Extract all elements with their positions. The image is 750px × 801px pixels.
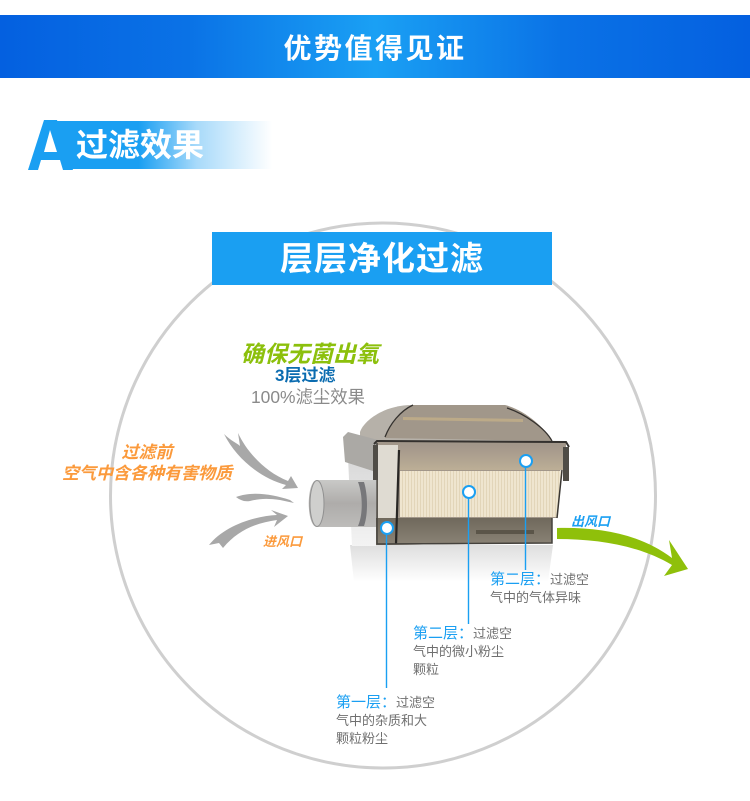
callout: layer 2 dust: 颗粒 bbox=[413, 662, 439, 677]
lower tray bbox=[376, 518, 552, 545]
headline group bbox=[241, 341, 382, 407]
callout: layer 1: 颗粒粉尘 bbox=[336, 731, 388, 746]
callout: layer 2 dust: 气中的微小粉尘 bbox=[413, 644, 504, 659]
intake label: 进风口 bbox=[263, 534, 302, 549]
left flange bbox=[343, 432, 378, 472]
heading band bbox=[57, 121, 272, 169]
blue subtitle: 3层过滤 bbox=[275, 366, 335, 385]
callout: layer 2 gas: 气中的气体异味 bbox=[490, 590, 581, 605]
orange intake text bbox=[62, 443, 234, 483]
inlet pipe bbox=[309, 480, 376, 527]
dark frame lines bbox=[374, 441, 569, 447]
body bbox=[376, 441, 566, 545]
callout: layer 1 bbox=[336, 694, 435, 746]
callout: layer 1: 第一层：过滤空 bbox=[336, 694, 435, 711]
title box: 层层净化过滤 bbox=[280, 240, 484, 277]
top banner: 优势值得见证 bbox=[283, 33, 466, 64]
callout: layer 2 dust bbox=[413, 625, 512, 677]
orange intake text: 过滤前 bbox=[122, 443, 172, 462]
heading text: 过滤效果 bbox=[76, 127, 204, 163]
green slogan: 确保无菌出氧 bbox=[241, 341, 379, 367]
callout: layer 2 dust: 第二层：过滤空 bbox=[413, 625, 512, 642]
pleated filter bbox=[400, 471, 561, 517]
dome bbox=[360, 405, 551, 441]
title box bbox=[212, 232, 552, 285]
reflection bbox=[350, 545, 553, 582]
section heading: A bbox=[28, 120, 265, 170]
grey line: 100%滤尘效果 bbox=[251, 387, 365, 407]
top banner bbox=[0, 15, 750, 78]
back side wall bbox=[348, 457, 376, 546]
callout: layer 1: 气中的杂质和大 bbox=[336, 713, 427, 728]
letter A bbox=[28, 120, 73, 170]
orange intake text: 空气中含各种有害物质 bbox=[62, 464, 232, 483]
callout: layer 2 gas bbox=[490, 571, 589, 605]
callout: layer 2 gas: 第二层：过滤空 bbox=[490, 571, 589, 588]
outlet label: 出风口 bbox=[571, 514, 610, 529]
